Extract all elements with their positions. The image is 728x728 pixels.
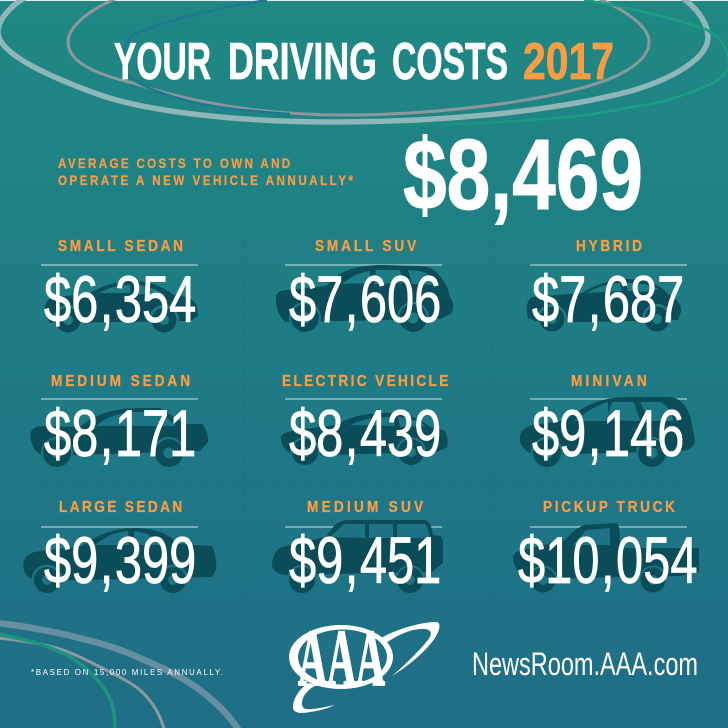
- card: electric vehicle: $8,439: [289, 397, 441, 471]
- card: pickup truck: $10,054: [518, 524, 698, 598]
- card: medium suv: MEDIUM SUV: [307, 499, 423, 516]
- card: electric vehicle: [281, 373, 449, 471]
- average cost description: OPERATE A NEW VEHICLE ANNUALLY*: [58, 173, 353, 188]
- card: minivan: $9,146: [532, 397, 684, 471]
- title: [114, 33, 614, 91]
- card: minivan: MINIVAN: [571, 373, 647, 390]
- card: medium suv: [272, 499, 443, 598]
- card: small suv: SMALL SUV: [315, 238, 416, 255]
- title: DRIVING: [228, 33, 377, 91]
- card: small suv: [276, 238, 453, 337]
- card: medium sedan: MEDIUM SEDAN: [51, 373, 190, 390]
- card: hybrid: HYBRID: [576, 238, 642, 255]
- average cost description: [58, 156, 353, 188]
- card: medium suv: $9,451: [289, 524, 441, 598]
- decorative footer swooshes: [0, 623, 240, 728]
- card: medium sedan: $8,171: [44, 397, 196, 471]
- average cost figure: $8,469: [403, 119, 643, 231]
- card: pickup truck: PICKUP TRUCK: [543, 499, 675, 516]
- card: small suv: $7,606: [289, 263, 441, 337]
- average cost description: AVERAGE COSTS TO OWN AND: [58, 156, 290, 171]
- card: electric vehicle: ELECTRIC VEHICLE: [282, 373, 449, 390]
- card: hybrid: $7,687: [532, 263, 684, 337]
- card: large sedan: $9,399: [44, 524, 196, 598]
- card: large sedan: LARGE SEDAN: [59, 499, 182, 516]
- card: large sedan: [23, 499, 216, 598]
- card: minivan: [520, 373, 695, 471]
- AAA logo: AAA: [298, 615, 385, 703]
- title: 2017: [523, 33, 614, 91]
- card: small sedan: $6,354: [44, 263, 196, 337]
- decorative header ellipses: [0, 0, 728, 125]
- card: medium sedan: [30, 373, 208, 471]
- footnote: *BASED ON 15,000 MILES ANNUALLY.: [31, 668, 223, 677]
- card: small sedan: SMALL SEDAN: [58, 238, 183, 255]
- title: COSTS: [392, 33, 508, 91]
- title: YOUR: [114, 33, 211, 91]
